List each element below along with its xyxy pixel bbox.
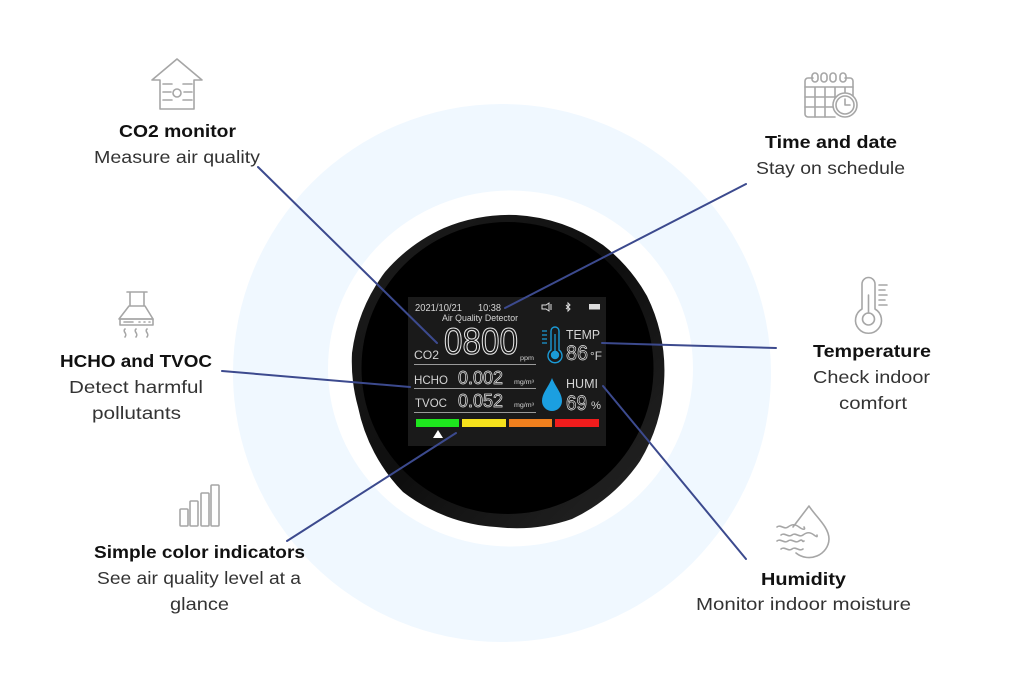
humidity value: 69 bbox=[566, 392, 587, 415]
icon: signal bars bbox=[180, 485, 219, 526]
heading: Simple color indicators bbox=[94, 542, 305, 562]
screen background bbox=[408, 297, 606, 446]
TVOC label: TVOC bbox=[415, 396, 447, 410]
device outer rim bbox=[352, 215, 664, 528]
icon: battery bbox=[589, 304, 600, 310]
background outer light-blue circle bbox=[233, 104, 771, 642]
color indicator bars bbox=[416, 419, 599, 427]
device black face bbox=[362, 222, 654, 514]
temperature unit: °F bbox=[590, 349, 602, 363]
CO2 label: CO2 bbox=[414, 348, 439, 362]
description: Monitor indoor moisture bbox=[696, 594, 911, 614]
heading: CO2 monitor bbox=[119, 121, 236, 141]
screen title: Air Quality Detector bbox=[442, 313, 518, 323]
connector lines bbox=[222, 167, 776, 559]
description: Measure air quality bbox=[94, 147, 260, 167]
humidity percent: % bbox=[591, 400, 601, 412]
feature: Temperature: comfort bbox=[839, 393, 907, 413]
ppm unit: ppm bbox=[520, 355, 534, 362]
description: See air quality level at a bbox=[97, 568, 301, 588]
icon: house with airflow bbox=[152, 59, 202, 109]
HUMI label: HUMI bbox=[566, 376, 598, 391]
feature: HCHO and TVOC: pollutants bbox=[92, 403, 181, 423]
feature: HCHO and TVOC bbox=[60, 292, 212, 423]
TEMP label: TEMP bbox=[566, 327, 600, 342]
icon: speaker bbox=[542, 303, 551, 311]
icon: droplet with waves bbox=[777, 506, 829, 558]
icon: thermometer bbox=[856, 278, 887, 333]
feature: Humidity bbox=[696, 506, 911, 614]
heading: Time and date bbox=[765, 132, 897, 152]
description: Check indoor bbox=[813, 367, 930, 387]
feature: Time and date bbox=[756, 73, 905, 178]
icon: blue thermometer bbox=[542, 327, 562, 363]
feature: Temperature bbox=[813, 278, 931, 413]
description: Detect harmful bbox=[69, 377, 203, 397]
HCHO value: 0.002 bbox=[458, 368, 503, 388]
icon: range hood bbox=[119, 292, 153, 337]
TVOC unit: mg/m³ bbox=[514, 402, 535, 409]
heading: Humidity bbox=[761, 569, 846, 589]
icon: calendar with clock bbox=[805, 73, 857, 117]
icon: bluetooth bbox=[566, 303, 570, 311]
heading: Temperature bbox=[813, 341, 931, 361]
device screen bbox=[408, 297, 606, 446]
feature: CO2 monitor bbox=[94, 59, 260, 167]
feature: Simple color indicators bbox=[94, 485, 305, 614]
device body bbox=[352, 215, 664, 528]
description: Stay on schedule bbox=[756, 158, 905, 178]
indicator triangle bbox=[433, 430, 443, 438]
inner white circle bbox=[328, 190, 693, 546]
date: 2021/10/21 bbox=[415, 303, 462, 314]
screen divider rows bbox=[414, 364, 536, 412]
TVOC value: 0.052 bbox=[458, 391, 503, 411]
HCHO label: HCHO bbox=[414, 373, 448, 387]
heading: HCHO and TVOC bbox=[60, 351, 212, 371]
CO2 value: 0800 bbox=[444, 321, 518, 362]
icon: blue drop bbox=[542, 378, 562, 411]
feature: Simple color indicators: glance bbox=[170, 594, 229, 614]
HCHO unit: mg/m³ bbox=[514, 379, 535, 386]
time: 10:38 bbox=[478, 303, 501, 314]
temperature value: 86 bbox=[566, 342, 588, 365]
